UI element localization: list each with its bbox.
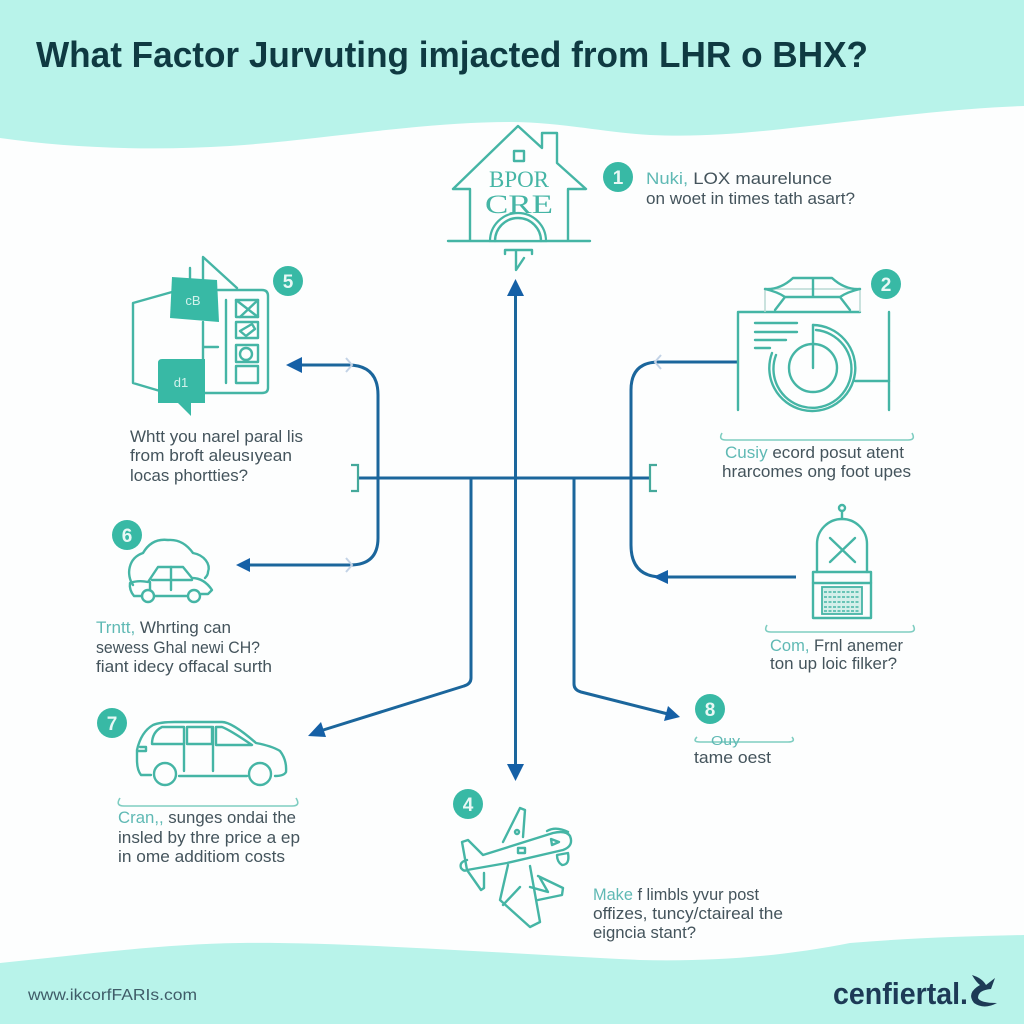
text: item 7	[118, 808, 300, 866]
text: item 1: on woet in times tath asart?	[646, 190, 855, 208]
panel: item 8 cost	[694, 694, 793, 767]
text: item 4: offizes, tuncy/ctaireal the	[593, 904, 783, 923]
panel: item 6 car in cloud	[96, 520, 272, 676]
text: item 2	[722, 443, 911, 481]
badge 4	[453, 789, 483, 819]
badge 4: 4	[463, 795, 474, 816]
badge 1	[603, 162, 633, 192]
icon: car and dial document	[738, 278, 889, 411]
connector network	[236, 279, 796, 781]
icon: kiosk with cross	[813, 505, 871, 618]
icon: checklist with notes: cB	[185, 293, 201, 308]
text: item 6: fiant idecy offacal surth	[96, 657, 272, 676]
bracket: item 2	[721, 433, 913, 440]
text: item 3: Com, Frnl anemer	[770, 636, 903, 655]
central vertical double arrow	[507, 279, 524, 781]
text: item 5: locas phortties?	[130, 466, 248, 485]
text: item 3	[770, 636, 903, 673]
text: item 4: Make f limbls yvur post	[593, 885, 759, 904]
icon: plane	[461, 808, 571, 927]
text: item 8 heading: Ouy	[711, 733, 741, 748]
icon: cloud with car	[129, 540, 212, 602]
arrow to item 2	[631, 355, 738, 478]
badge 6	[112, 520, 142, 550]
badge 8: 8	[705, 700, 715, 721]
panel: item 2 dial	[721, 269, 913, 481]
footer wave band	[0, 935, 1024, 1024]
bracket: item 8	[695, 737, 793, 742]
text: item 1: Nuki, LOX maurelunce	[646, 170, 832, 188]
text: item 2: hrarcomes ong foot upes	[722, 462, 911, 481]
text: item 5: from broft aleusıyean	[130, 446, 292, 465]
arrow to item 6	[236, 478, 378, 572]
badge 7: 7	[107, 714, 117, 735]
icon: checklist with notes	[133, 257, 268, 416]
badge 7	[97, 708, 127, 738]
panel: item 3 kiosk	[766, 505, 914, 673]
panel: item 1 house	[448, 126, 855, 270]
text: item 1	[646, 170, 855, 208]
badge 1: 1	[613, 168, 624, 189]
arrow to item 5	[286, 357, 378, 478]
arrow to item 7	[308, 478, 471, 737]
text: item 3: ton up loic filker?	[770, 654, 897, 673]
text: item 4	[593, 885, 783, 942]
icon: checklist with notes: d1	[174, 375, 188, 390]
bracket: item 3	[766, 625, 914, 632]
panel: item 4 plane	[453, 789, 783, 942]
text: item 5: Whtt you narel paral lis	[130, 427, 303, 446]
icon: house	[448, 126, 590, 270]
badge 6: 6	[122, 526, 132, 547]
text: item 6: sewess Ghal newi CH?	[96, 638, 260, 657]
text: item 8: tame oest	[694, 748, 771, 767]
title: What Factor Jurvuting imjacted from LHR o BHX?	[36, 34, 868, 75]
text: item 7: in ome additiom costs	[118, 847, 285, 866]
badge 2: 2	[881, 275, 891, 296]
central horizontal bus with brackets	[351, 465, 657, 491]
icon: house: CRE	[485, 190, 553, 219]
panel: item 7 van	[97, 708, 300, 866]
text: item 6: Trntt, Whrting can	[96, 618, 231, 637]
badge 5: 5	[283, 272, 294, 293]
text: item 7: Cran,, sunges ondai the	[118, 808, 296, 827]
icon: van	[137, 722, 286, 785]
text: item 6	[96, 618, 272, 676]
text: item 5	[130, 427, 303, 485]
panel: item 5 checklist	[130, 257, 303, 485]
badge 2	[871, 269, 901, 299]
text: item 7: insled by thre price a ep	[118, 828, 300, 847]
footer logo: cenfiertal.	[833, 976, 968, 1011]
arrow from item 3	[631, 478, 796, 584]
bracket: item 7	[118, 798, 298, 806]
text: item 2: Cusiy ecord posut atent	[725, 443, 904, 462]
header wave band	[0, 0, 1024, 148]
badge 5	[273, 266, 303, 296]
icon: house: BPOR	[489, 167, 550, 192]
footer url: www.ikcorfFARIs.com	[27, 987, 197, 1004]
arrow to item 8	[574, 478, 680, 721]
text: item 4: eigncia stant?	[593, 923, 696, 942]
